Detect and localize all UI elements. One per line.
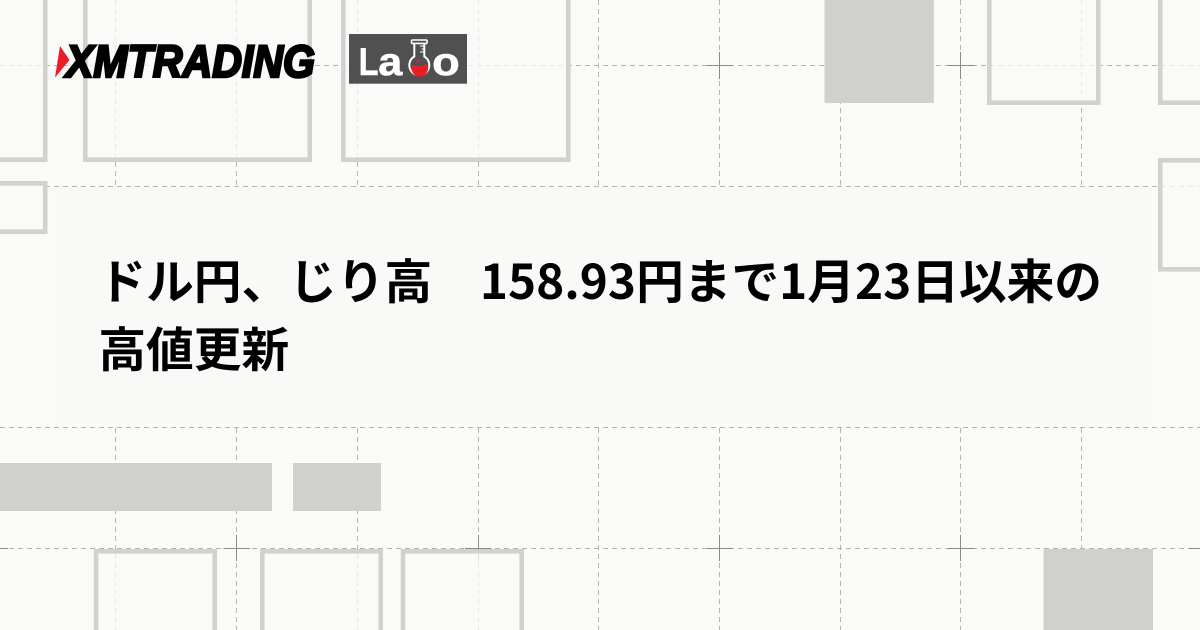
- title panel: [52, 187, 1150, 422]
- logo: Lab: [349, 34, 467, 84]
- logo: Lab: o: [432, 41, 460, 84]
- logo: Lab: L: [359, 41, 379, 84]
- icon: flask: [409, 40, 429, 77]
- logo: Lab: a: [378, 41, 403, 84]
- title: 高値更新: [98, 312, 289, 381]
- title: ドル円、じり高 158.93円まで1月23日以来の: [98, 244, 1102, 313]
- title: [98, 244, 1102, 381]
